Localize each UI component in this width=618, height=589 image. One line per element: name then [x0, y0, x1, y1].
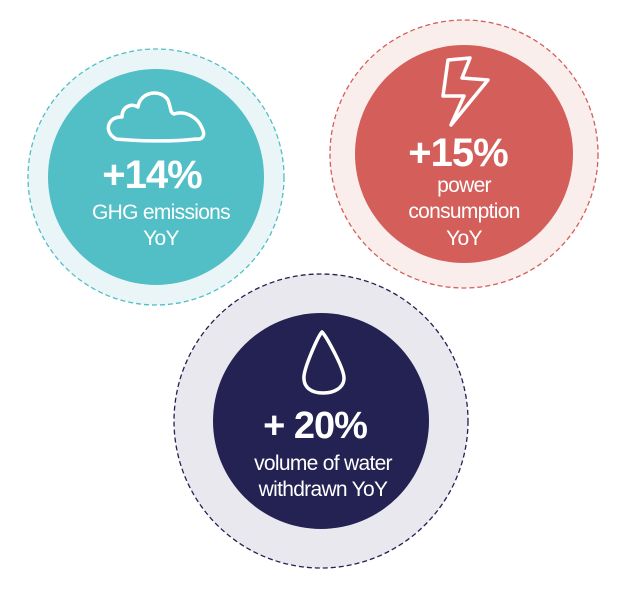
panel: water withdrawn	[174, 274, 468, 568]
icon: water drop	[304, 332, 344, 393]
label: power consumption YoY: consumption	[408, 200, 520, 223]
label: power consumption YoY: YoY	[446, 227, 483, 250]
panel: GHG emissions	[28, 49, 284, 305]
label: volume of water withdrawn YoY: withdrawn YoY	[258, 478, 388, 501]
stat: +20%: + 20%	[263, 405, 367, 447]
label: GHG emissions YoY: YoY	[143, 227, 180, 250]
icon: lightning bolt	[443, 58, 488, 125]
label: GHG emissions YoY: GHG emissions	[92, 201, 230, 224]
icon: cloud	[108, 93, 204, 141]
label: power consumption YoY: power	[437, 174, 492, 197]
panel: power consumption	[330, 20, 598, 288]
stat: +15%: +15%	[408, 131, 508, 175]
stat: +14%: +14%	[102, 153, 202, 197]
label: volume of water withdrawn YoY: volume of water	[254, 452, 393, 475]
